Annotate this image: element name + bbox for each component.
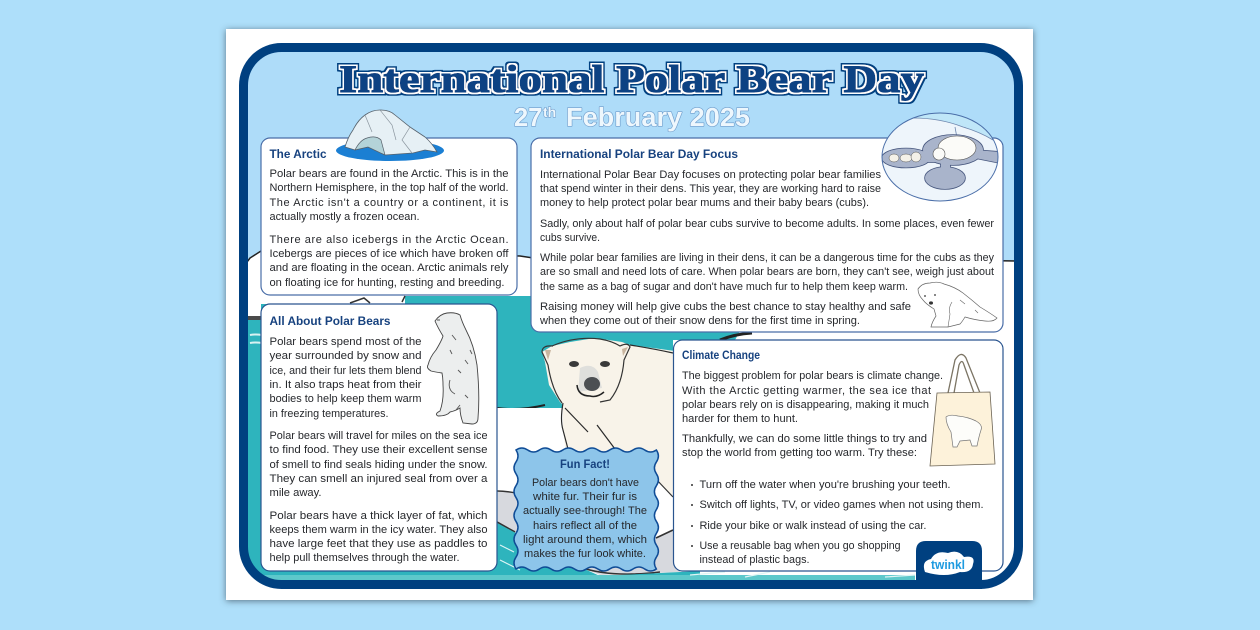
title: International Polar Bear Day	[339, 58, 925, 101]
body text: when they come out of their snow dens for the first time in spring.	[539, 315, 860, 327]
icon: standing polar bear	[427, 313, 479, 424]
body text: light around them, which	[523, 534, 647, 546]
body text: International Polar Bear Day focuses on protecting polar bear families	[540, 169, 881, 181]
body text: While polar bear families are living in their dens, it can be a dangerous time for the cubs as they	[540, 252, 994, 264]
body text: They can smell an injured seal from over a	[270, 473, 488, 485]
body text: The biggest problem for polar bears is climate change.	[682, 370, 943, 382]
background scene	[244, 48, 1018, 584]
body text: keeps them warm in the icy water. They also	[270, 524, 488, 536]
body text: Polar bears will travel for miles on the sea ice	[270, 430, 488, 442]
body text: Sadly, only about half of polar bear cubs survive to become adults. In some places, even fewer	[540, 218, 994, 230]
body text: Polar bears don't have	[532, 477, 639, 489]
logo: twinkl: twinkl	[931, 558, 965, 572]
frame border	[244, 48, 1018, 584]
panel box	[531, 138, 1003, 332]
body text: Thankfully, we can do some little things to try and	[682, 433, 927, 445]
heading: All About Polar Bears	[270, 316, 390, 328]
body text	[682, 370, 943, 459]
body text: stop the world from getting too warm. Try these:	[682, 447, 917, 459]
body text: polar bears rely on is disappearing, making it much	[682, 399, 929, 411]
bullet list	[691, 479, 984, 566]
body text: year surrounded by snow and	[270, 350, 422, 362]
subtitle: date: th	[543, 104, 556, 120]
bullet list: Use a reusable bag when you go shopping	[700, 540, 900, 552]
body text: mile away.	[270, 487, 322, 499]
heading: International Polar Bear Day Focus	[540, 149, 738, 161]
icon: tote bag	[930, 354, 995, 466]
body text: There are also icebergs in the Arctic Ocean.	[270, 234, 508, 246]
bullet list: instead of plastic bags.	[700, 554, 810, 566]
body text: to find food. They use their excellent sense	[270, 444, 488, 456]
white page card	[226, 29, 1033, 600]
body text: the same as a bag of sugar and don't have much fur to help them keep warm.	[540, 281, 908, 293]
body text: help pull themselves through the water.	[270, 552, 460, 564]
body text: Polar bears are found in the Arctic. This is in the	[270, 168, 508, 180]
logo: twinkl	[916, 541, 982, 589]
panel box	[674, 340, 1003, 571]
callout: Fun Fact	[514, 448, 658, 571]
body text: With the Arctic getting warmer, the sea ice that	[682, 385, 931, 397]
body text: have large feet that they use as paddles to	[270, 538, 488, 550]
body text: money to help protect polar bear mums and their baby bears (cubs).	[540, 197, 869, 209]
illustration: large polar bear	[542, 338, 690, 497]
subtitle: date: February 2025	[566, 104, 750, 132]
body text: Polar bears spend most of the	[270, 336, 422, 348]
body text: in freezing temperatures.	[270, 408, 388, 420]
body text: makes the fur look white.	[524, 548, 646, 560]
body text: and are floating in the ocean. Arctic animals rely	[270, 262, 509, 274]
body text: Raising money will help give cubs the best chance to stay healthy and safe	[540, 301, 911, 313]
body text: Polar bears have a thick layer of fat, which	[270, 510, 488, 522]
body text	[270, 336, 488, 564]
body text: bodies to help keep them warm	[270, 393, 422, 405]
body text: Icebergs are pieces of ice which have broken off	[270, 248, 509, 260]
panel box	[261, 304, 497, 571]
body text: are so small and need lots of care. When polar bears are born, they can't see, weigh just about	[540, 266, 994, 278]
body text: hairs reflect all of the	[533, 520, 637, 532]
body text: on floating ice for hunting, resting and breeding.	[270, 277, 504, 289]
body text: white fur. Their fur is	[532, 491, 638, 503]
bullet list: Ride your bike or walk instead of using the car.	[700, 520, 926, 532]
heading: Climate Change	[682, 350, 760, 362]
body text	[539, 169, 994, 327]
body text: of smell to find seals hiding under the snow.	[270, 459, 488, 471]
panel: International Polar Bear Day Focus	[531, 138, 1003, 332]
body text: Northern Hemisphere, in the top half of the world.	[270, 182, 508, 194]
bullet list: Turn off the water when you're brushing your teeth.	[700, 479, 950, 491]
body text: The Arctic isn't a country or a continent, it is	[270, 197, 509, 209]
panel box	[261, 138, 517, 295]
body text: actually mostly a frozen ocean.	[270, 211, 420, 223]
body text: that spend winter in their dens. This year, they are working hard to raise	[540, 183, 881, 195]
heading: Fun Fact!	[560, 459, 610, 471]
body text: cubs survive.	[540, 232, 600, 244]
body text: harder for them to hunt.	[682, 413, 798, 425]
bullet list: Switch off lights, TV, or video games when not using them.	[700, 499, 984, 511]
body text	[270, 168, 509, 289]
subtitle: date: 27	[514, 104, 542, 132]
body text: actually see-through! The	[523, 505, 647, 517]
icon: iceberg	[336, 110, 444, 161]
body text: in. It also traps heat from their	[270, 379, 422, 391]
panel: All About Polar Bears	[261, 304, 497, 571]
panel: The Arctic	[261, 138, 517, 295]
panel: Climate Change	[674, 340, 1003, 571]
icon: snow den	[880, 112, 1000, 201]
heading: The Arctic	[270, 149, 327, 161]
body text: ice, and their fur lets them blend	[270, 365, 422, 377]
icon: polar bear cub	[918, 282, 997, 327]
body text	[523, 477, 647, 560]
wavy box	[514, 448, 658, 571]
